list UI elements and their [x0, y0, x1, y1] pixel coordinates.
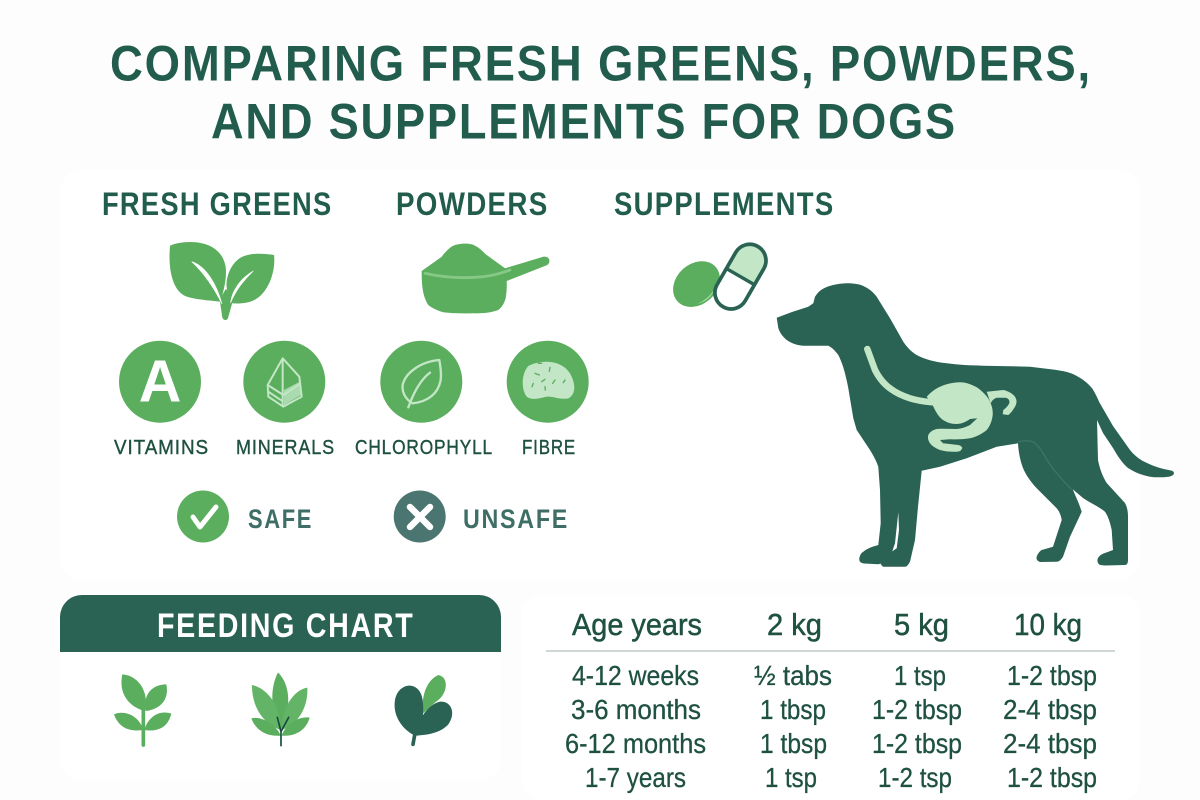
icon: leafy herb	[251, 672, 310, 746]
illustration: dog silhouette with digestive tract	[777, 283, 1174, 567]
legend: safe	[177, 490, 313, 542]
nutrient: fibre	[507, 341, 589, 459]
icon: fresh greens leaves	[170, 242, 274, 319]
panel: overview background	[60, 170, 1140, 580]
icon: supplement tablet and capsule	[664, 238, 772, 316]
table row: 3-6 months	[571, 694, 1097, 725]
table row: 1-7 years	[585, 762, 1097, 793]
table header: 10 kg	[1014, 607, 1082, 642]
table row: 3-6 months: 1 tbsp	[760, 694, 826, 725]
nutrient: fibre: FIBRE	[522, 436, 576, 459]
title	[110, 36, 1092, 150]
icon: spinach leaves	[395, 675, 452, 744]
table row: 4-12 weeks: 1-2 tbsp	[1007, 660, 1097, 691]
legend: unsafe: UNSAFE	[463, 504, 569, 534]
icon: green sprig	[114, 674, 171, 745]
title: AND SUPPLEMENTS FOR DOGS	[211, 94, 957, 150]
heading: fresh greens: FRESH GREENS	[102, 186, 332, 222]
title: COMPARING FRESH GREENS, POWDERS,	[110, 36, 1092, 92]
panel: feeding chart	[60, 595, 501, 780]
nutrient: minerals: MINERALS	[236, 436, 335, 459]
table row: 6-12 months: 1-2 tbsp	[872, 728, 962, 759]
nutrient: vitamins	[114, 341, 209, 459]
nutrient: vitamins: VITAMINS	[114, 436, 209, 459]
nutrient: chlorophyll	[355, 341, 493, 459]
legend: safe: SAFE	[248, 504, 313, 534]
table row: 6-12 months: 1 tbsp	[760, 728, 827, 759]
table header	[572, 607, 1082, 642]
icon: powder scoop	[422, 244, 549, 313]
feeding chart header	[60, 595, 501, 652]
table row: 4-12 weeks: 1 tsp	[894, 660, 946, 691]
nutrient: vitamins: A	[139, 348, 181, 414]
nutrient: minerals	[236, 341, 335, 459]
legend: unsafe	[394, 490, 569, 542]
table header: 5 kg	[894, 607, 949, 642]
table row: 6-12 months	[565, 728, 1097, 759]
heading: supplements: SUPPLEMENTS	[614, 186, 834, 222]
table row: 4-12 weeks: 4-12 weeks	[572, 660, 699, 691]
table row: 1-7 years: 1-2 tsp	[878, 762, 952, 793]
table row: 1-7 years: 1-7 years	[585, 762, 686, 793]
heading: powders: POWDERS	[396, 186, 548, 222]
table header: 2 kg	[767, 607, 822, 642]
table header: Age years	[572, 607, 702, 642]
table row: 6-12 months: 6-12 months	[565, 728, 706, 759]
nutrient: chlorophyll: CHLOROPHYLL	[355, 436, 493, 459]
table row: 4-12 weeks	[572, 660, 1097, 691]
table row: 1-7 years: 1 tsp	[765, 762, 817, 793]
panel: feeding table	[522, 595, 1140, 800]
table row: 3-6 months: 2-4 tbsp	[1003, 694, 1097, 725]
table row: 3-6 months: 1-2 tbsp	[872, 694, 962, 725]
table row: 1-7 years: 1-2 tbsp	[1007, 762, 1097, 793]
feeding chart title: FEEDING CHART	[157, 607, 414, 645]
table row: 6-12 months: 2-4 tbsp	[1003, 728, 1097, 759]
table row: 3-6 months: 3-6 months	[571, 694, 701, 725]
table row: 4-12 weeks: ½ tabs	[754, 660, 832, 691]
